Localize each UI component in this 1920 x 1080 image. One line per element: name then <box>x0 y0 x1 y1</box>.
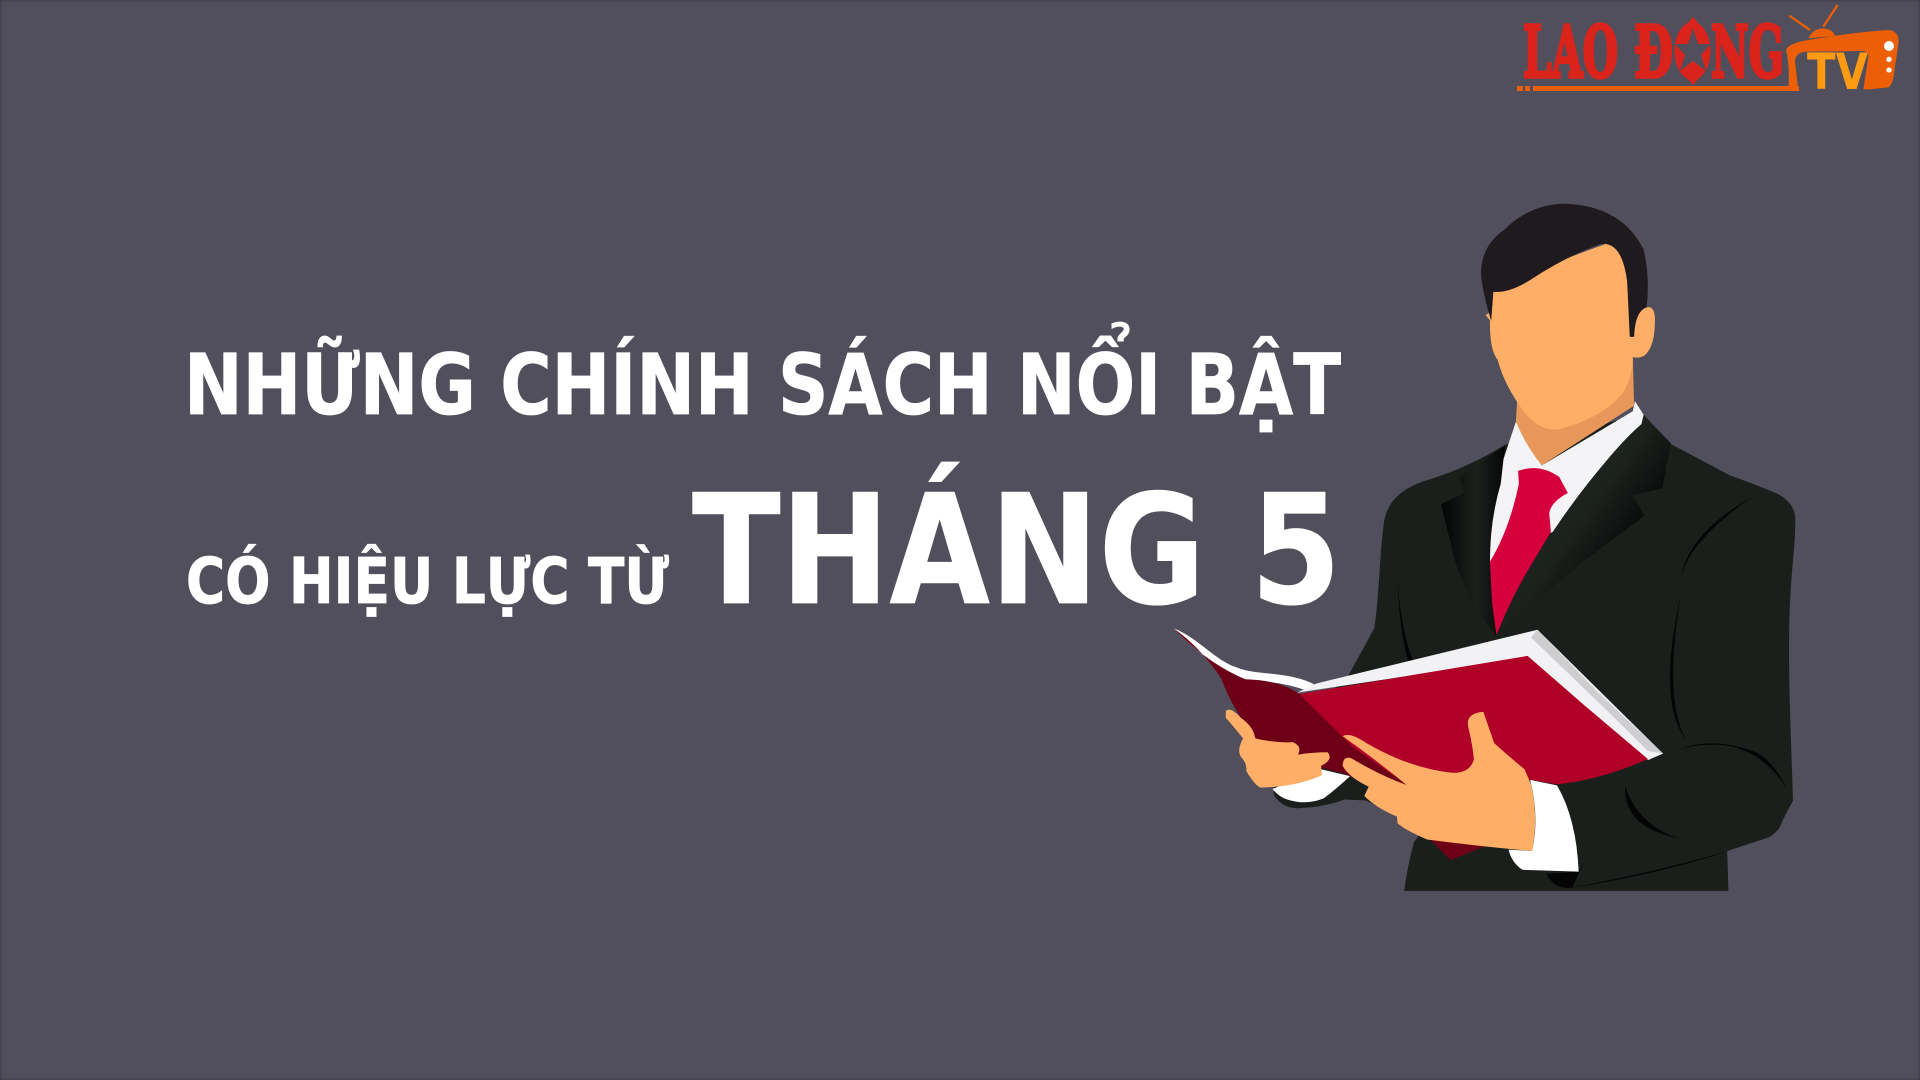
logo wordmark: NG <box>1711 10 1784 94</box>
left ear sliver <box>1486 312 1492 323</box>
book: left cover <box>1174 628 1410 787</box>
book: lower cover <box>1423 833 1490 860</box>
suit jacket <box>1273 415 1795 891</box>
TV frame <box>1786 30 1899 91</box>
logo star emblem <box>1674 17 1711 85</box>
hair <box>1481 204 1648 337</box>
neck shadow <box>1516 355 1634 465</box>
left hand cuff <box>1273 769 1350 802</box>
book: left page edge <box>1174 628 1319 690</box>
jacket wrinkles <box>1398 498 1787 888</box>
left hand <box>1226 710 1330 788</box>
title line 2 highlight: month: THÁNG 5 <box>692 462 1341 639</box>
title line 1: NHỮNG CHÍNH SÁCH NỔI BẬT <box>184 322 1341 434</box>
logo wordmark <box>1523 10 1784 94</box>
necktie <box>1490 468 1568 635</box>
book: white pages <box>1297 630 1663 760</box>
logo wordmark: Đ <box>1634 10 1673 94</box>
right hand <box>1343 712 1535 851</box>
title: headline text <box>184 322 1341 639</box>
TV dome <box>1808 28 1835 38</box>
book: red cover <box>1299 656 1648 787</box>
right cuff <box>1509 780 1579 872</box>
right lapel <box>1496 415 1671 635</box>
logo TV letters: TV <box>1807 43 1868 101</box>
title line 2 lead-in: CÓ HIỆU LỰC TỪ <box>186 545 669 618</box>
ear <box>1630 307 1655 358</box>
book: page edge shading <box>1531 630 1663 754</box>
shirt collar <box>1490 401 1644 562</box>
illustration: businessman reading a red book <box>1174 204 1795 891</box>
TV dots <box>1884 41 1894 73</box>
logo TV set <box>1786 5 1899 91</box>
left lapel <box>1441 446 1505 635</box>
logo: Lao Dong TV <box>1517 5 1899 101</box>
logo underline <box>1517 86 1799 91</box>
face <box>1490 243 1633 430</box>
TV antennas <box>1789 5 1838 30</box>
logo wordmark: LAO <box>1523 10 1618 94</box>
